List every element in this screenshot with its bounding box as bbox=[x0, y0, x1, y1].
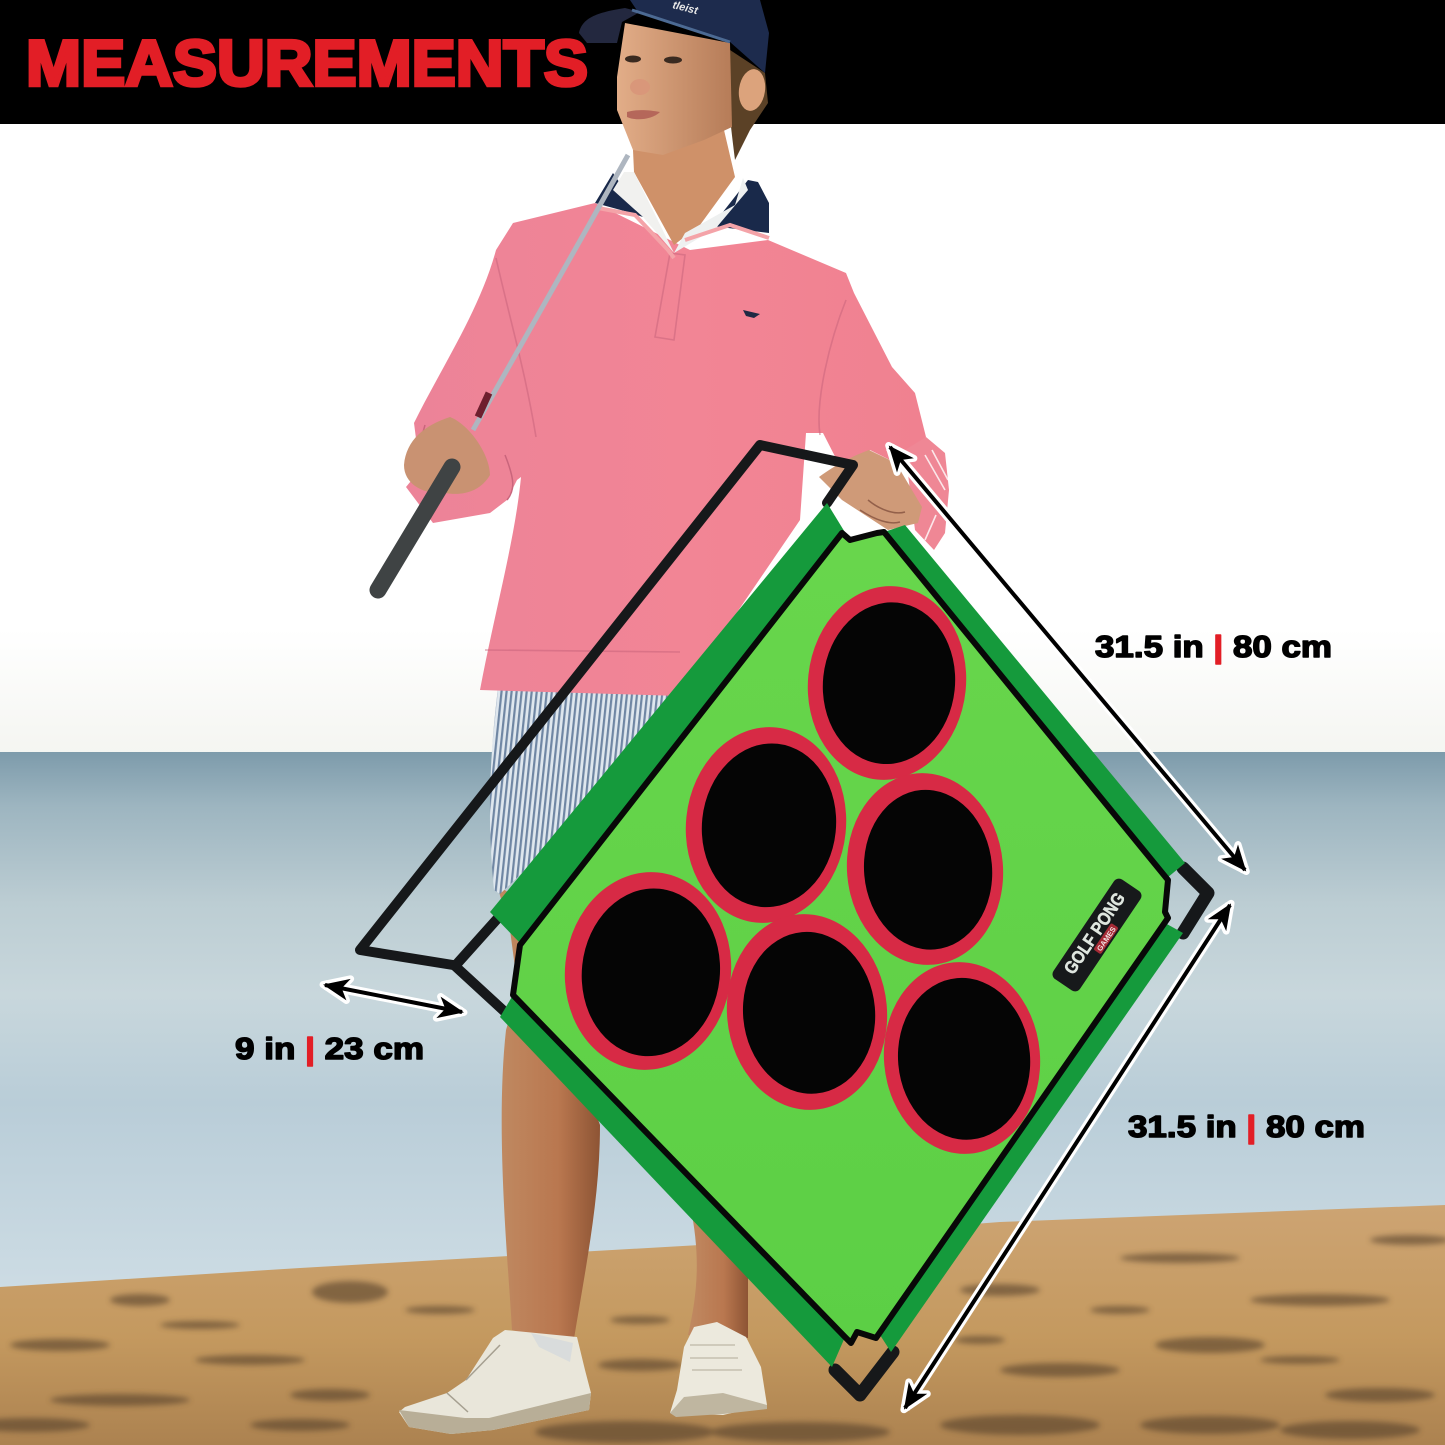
sand shadows bbox=[0, 1235, 1445, 1443]
finger lines bbox=[860, 500, 905, 523]
sweater right cuff bbox=[905, 437, 949, 550]
hole 6 bbox=[876, 956, 1048, 1160]
left shoe bbox=[399, 1330, 591, 1434]
lime playing surface with black trim bbox=[513, 532, 1168, 1343]
label: bottom side size: 31.5 in | 80 cm bbox=[1128, 1109, 1365, 1144]
target board bbox=[360, 445, 1208, 1395]
golf club grip bbox=[378, 467, 452, 590]
header band bbox=[0, 0, 1445, 124]
cuff stripes bbox=[925, 450, 948, 540]
sea bbox=[0, 752, 1445, 1292]
label: frame depth size: 9 in | 23 cm bbox=[235, 1031, 424, 1066]
hole 2 bbox=[676, 719, 856, 931]
frame tubes bbox=[360, 445, 1208, 1395]
left leg bbox=[497, 885, 600, 1345]
neck bbox=[633, 130, 735, 245]
sand bbox=[0, 1205, 1445, 1445]
title: MEASUREMENTS bbox=[26, 26, 588, 100]
dark green fabric strips bbox=[490, 503, 1185, 1367]
person bbox=[378, 0, 949, 1434]
cap bbox=[579, 0, 769, 73]
arrow: frame depth dimension bbox=[325, 985, 462, 1012]
right hand bbox=[819, 450, 922, 530]
arrow: bottom right side dimension bbox=[905, 905, 1230, 1408]
hair bbox=[728, 50, 768, 160]
hole 4 bbox=[555, 864, 741, 1078]
hole 3 bbox=[839, 767, 1011, 971]
sweater shading bbox=[485, 253, 846, 652]
sweater collar trim bbox=[598, 208, 769, 258]
sweater left cuff line bbox=[418, 425, 513, 500]
facial features bbox=[625, 56, 682, 119]
collar bbox=[595, 172, 769, 253]
sweater bbox=[406, 203, 926, 696]
right leg bbox=[688, 1205, 748, 1338]
label: top side size: 31.5 in | 80 cm bbox=[1095, 629, 1332, 664]
golf club collar bbox=[478, 393, 489, 417]
right shoe bbox=[670, 1322, 767, 1417]
ear bbox=[736, 67, 768, 113]
whale logo bbox=[743, 310, 760, 318]
hole 1 bbox=[798, 578, 976, 788]
shorts bbox=[490, 688, 682, 894]
arrow: top right side dimension bbox=[890, 447, 1245, 870]
golf club shaft bbox=[473, 155, 628, 430]
left hand bbox=[404, 417, 490, 494]
face bbox=[617, 23, 732, 155]
sky bbox=[0, 120, 1445, 756]
brand badge: GAMES bbox=[1095, 925, 1118, 953]
brand badge: GOLF PONG bbox=[1060, 889, 1129, 978]
hole 5 bbox=[719, 907, 895, 1117]
